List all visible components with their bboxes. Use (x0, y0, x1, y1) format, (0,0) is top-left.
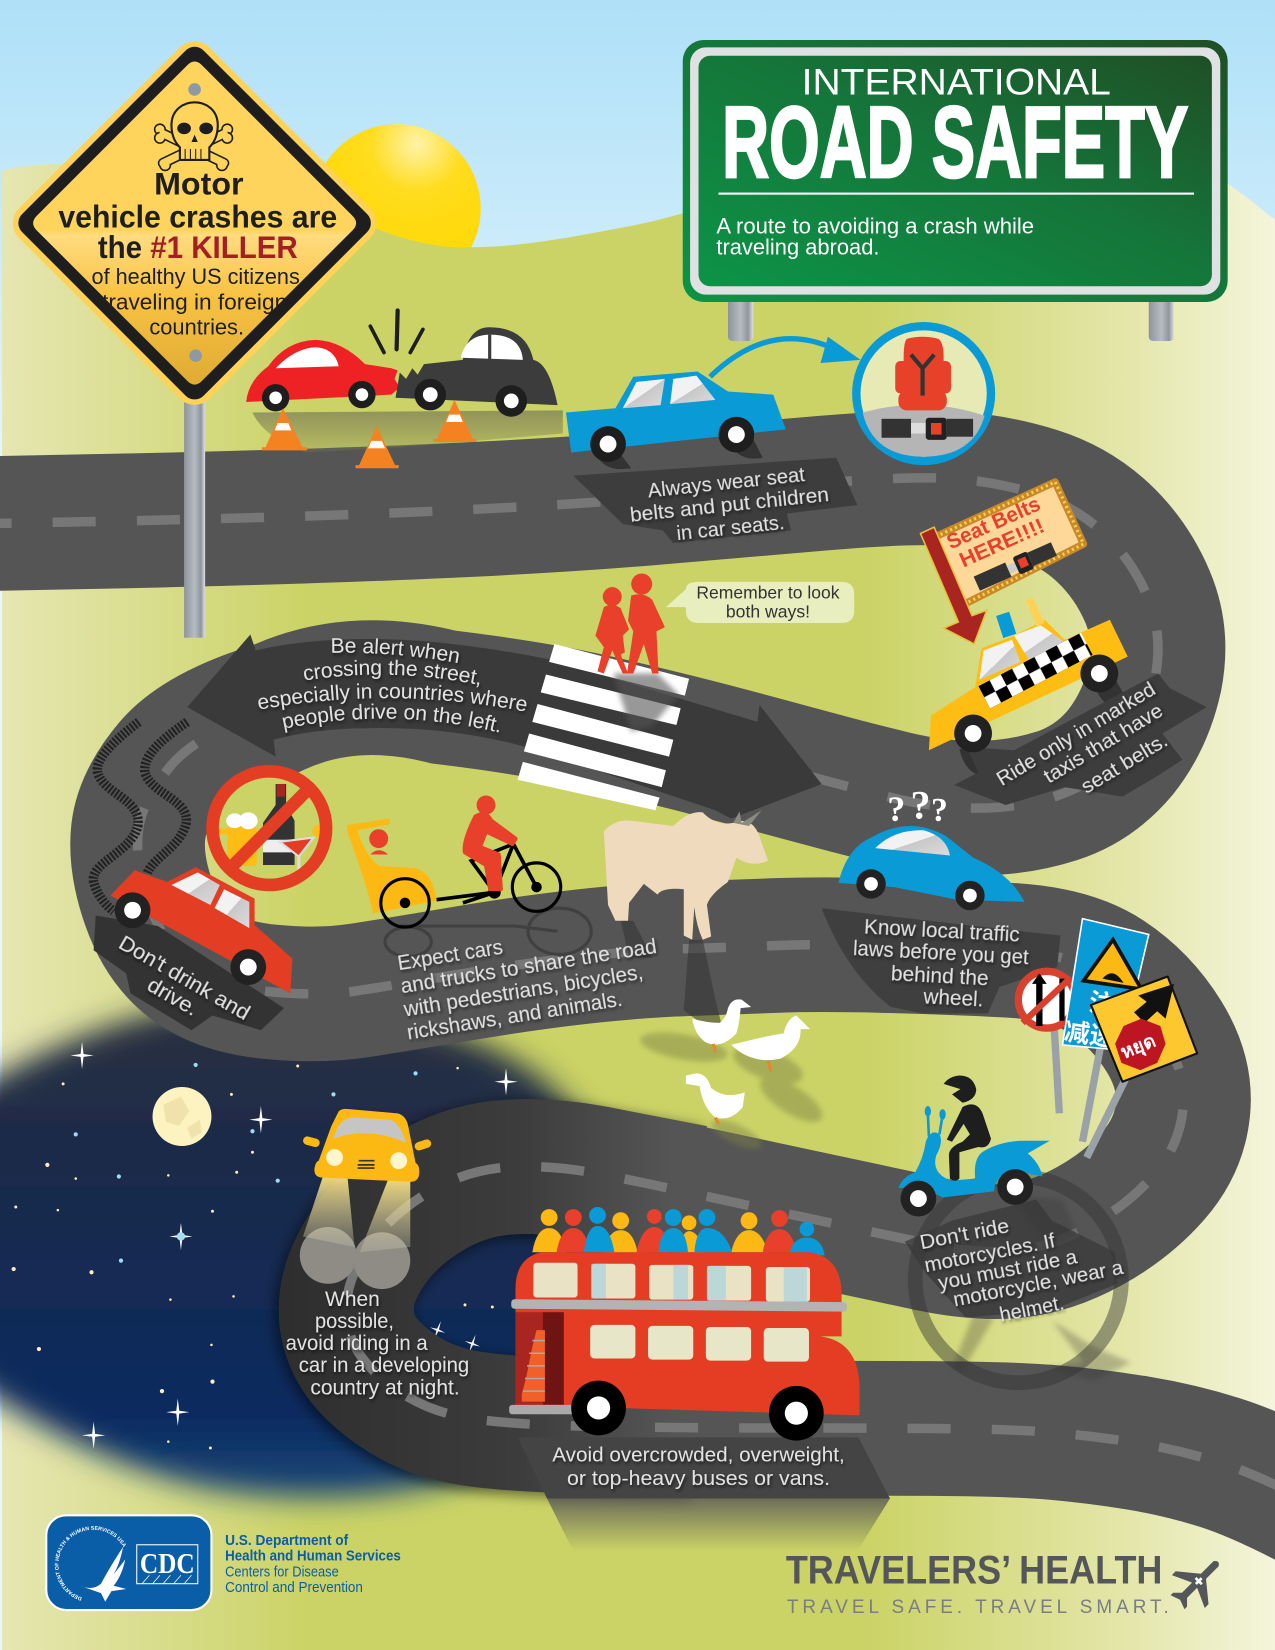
don't drink banner: drive. (143, 974, 202, 1021)
sign subtext: of healthy US citizens (92, 264, 300, 289)
yellow stop sign (1091, 977, 1197, 1082)
taxi banner (954, 673, 1207, 805)
impact marks (370, 310, 423, 353)
seat belt banner: in car seats. (675, 512, 786, 545)
title sign posts (728, 295, 1174, 341)
HHS CDC wordmark: Health and Human Services (225, 1549, 401, 1565)
seat belt banner: belts and put children (629, 484, 830, 527)
sign headline: vehicle crashes are (58, 198, 337, 234)
HHS CDC wordmark (225, 1533, 401, 1596)
travelers health wordmark: TRAVELERS’ HEALTH (786, 1549, 1162, 1593)
seat belt banner: Always wear seat (647, 464, 806, 503)
sign poles (1054, 1026, 1131, 1158)
don't drink banner: Don't drink and (115, 931, 254, 1025)
motorcycle banner with wheel shadow: Don't ride (918, 1215, 1011, 1254)
night car (302, 1109, 432, 1182)
HHS CDC logo: CDC (140, 1549, 195, 1580)
bus shadow banner: Avoid overcrowded, overweight, (552, 1445, 845, 1467)
ducks (686, 999, 810, 1124)
blue road sign: 注 (1087, 988, 1116, 1020)
know local banner: wheel. (922, 985, 984, 1012)
title sign (683, 40, 1228, 302)
night sky panel (0, 1002, 609, 1498)
blue road sign: 减速 (1063, 1018, 1117, 1053)
sign subtext: countries. (149, 315, 244, 340)
seat belts here sign: HERE!!!! (956, 514, 1048, 572)
moon (153, 1087, 211, 1146)
seat belts here sign (920, 482, 1084, 644)
know local banner (822, 908, 1060, 1013)
shared road text (396, 935, 658, 1045)
question marks: ? (910, 783, 930, 828)
shared road text: and trucks to share the road (399, 935, 658, 998)
speech bubble: both ways! (726, 602, 810, 622)
people on bus (532, 1207, 825, 1255)
title text: traveling abroad. (716, 235, 879, 260)
sign post (184, 389, 205, 638)
blue sedan (566, 371, 786, 469)
road (0, 478, 1275, 1510)
seat belts here sign: Seat Belts (943, 493, 1044, 554)
icon: airplane (1161, 1545, 1234, 1619)
pedestrians (595, 574, 665, 673)
don't drink banner (94, 915, 284, 1030)
yellow stop sign: หยุด (1117, 1030, 1159, 1065)
arrow to car seat (710, 337, 861, 377)
know local banner: behind the (890, 962, 989, 990)
blue bug car (838, 826, 1025, 910)
taxi banner: seat belts. (1077, 730, 1172, 798)
duck shadows (638, 1027, 829, 1155)
motorcycle banner with wheel shadow: you must ride a (936, 1246, 1080, 1295)
HHS CDC logo (45, 1514, 212, 1612)
question marks (887, 783, 948, 829)
scooter and rider (898, 1075, 1050, 1216)
question marks: ? (931, 792, 948, 829)
travelers health wordmark (786, 1549, 1169, 1618)
stars (12, 1042, 518, 1449)
round road sign (1018, 971, 1075, 1028)
night text: When (325, 1288, 380, 1311)
rickshaw and cyclist (347, 796, 561, 927)
dark car (396, 327, 558, 417)
title text (716, 62, 1194, 260)
cow shadow (621, 921, 726, 1042)
taxi (929, 612, 1128, 752)
taxi wheel shadows (959, 679, 1131, 776)
tire tracks (93, 722, 187, 911)
blue road sign (1062, 919, 1149, 1053)
seat belt banner (573, 458, 857, 545)
sign headline: Motor (154, 166, 244, 202)
shared road text: with pedestrians, bicycles, (401, 961, 645, 1022)
sign headline: the #1 KILLER (98, 229, 298, 265)
cow (604, 812, 768, 940)
crosswalk banner arrow: crossing the street, (304, 660, 480, 688)
crosswalk banner arrow (188, 634, 822, 818)
sign subtext (92, 264, 300, 340)
crosswalk banner arrow: especially in countries where (258, 683, 528, 714)
title text: A route to avoiding a crash while (716, 214, 1034, 239)
HHS CDC wordmark: Control and Prevention (225, 1580, 363, 1596)
HHS CDC wordmark: U.S. Department of (225, 1533, 348, 1549)
motorcycle banner with wheel shadow (905, 1176, 1131, 1383)
speech bubble (666, 582, 854, 623)
bus shadow banner: or top-heavy buses or vans. (567, 1468, 830, 1490)
night text: avoid riding in a (286, 1332, 428, 1355)
sun (312, 124, 481, 293)
speech bubble: Remember to look (696, 583, 840, 603)
cow horns (733, 810, 762, 826)
motorcycle banner with wheel shadow: motorcycle, wear a (951, 1257, 1126, 1311)
sign headline (58, 166, 337, 265)
rickshaw shadow (385, 908, 591, 957)
pedestrian shadow (613, 673, 679, 731)
travelers health wordmark: TRAVEL SAFE. TRAVEL SMART. (787, 1597, 1169, 1618)
know local banner: Know local traffic (864, 916, 1020, 947)
shared road text: Expect cars (396, 936, 504, 975)
motorcycle banner with wheel shadow: motorcycles. If (923, 1230, 1057, 1277)
HHS CDC wordmark: Centers for Disease (225, 1564, 339, 1580)
motorcycle banner with wheel shadow: helmet. (998, 1292, 1066, 1327)
sign subtext: traveling in foreign (102, 289, 287, 314)
traffic cones (262, 400, 477, 468)
icon: car seat circle (856, 326, 991, 461)
double decker bus (509, 1207, 859, 1441)
title text: INTERNATIONAL (802, 62, 1111, 103)
crosswalk stripes (518, 644, 689, 810)
headlight beams (300, 1173, 410, 1289)
red car (246, 340, 400, 411)
taxi banner: taxis that have (1040, 700, 1167, 788)
night text: car in a developing (299, 1354, 469, 1377)
night text: possible, (315, 1310, 394, 1333)
night text: country at night. (310, 1376, 460, 1399)
crash scene (246, 310, 563, 468)
icon: skull and crossbones (155, 102, 232, 170)
red sedan (110, 867, 292, 993)
question marks: ? (887, 789, 905, 829)
know local banner: laws before you get (852, 937, 1029, 969)
icon: no drinking (212, 771, 326, 885)
crosswalk banner arrow: people drive on the left. (282, 704, 499, 735)
shared road text: rickshaws, and animals. (405, 988, 624, 1045)
taxi banner: Ride only in marked (993, 679, 1159, 791)
HHS CDC logo: DEPARTMENT OF HEALTH & HUMAN SERVICES USA (54, 1526, 126, 1601)
crosswalk banner arrow: Be alert when (332, 638, 460, 665)
warning diamond sign (4, 33, 385, 414)
bus shadow banner (518, 1437, 890, 1551)
night text (286, 1288, 469, 1399)
